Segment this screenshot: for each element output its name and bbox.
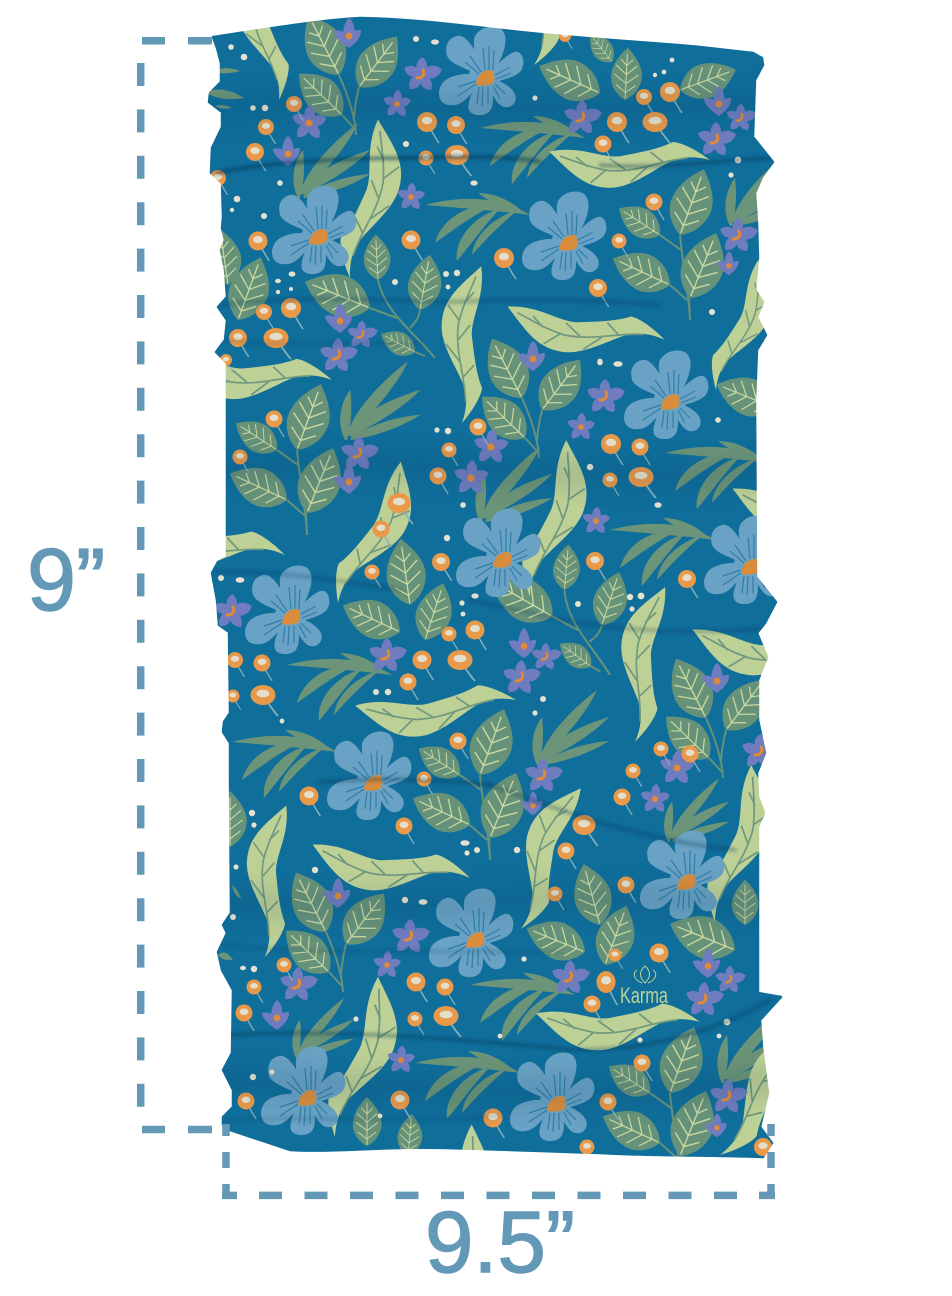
blue flowers	[246, 28, 787, 1140]
orange berries	[210, 30, 774, 1166]
fabric folds and shading	[210, 100, 780, 1122]
fabric: neck gaiter	[208, 16, 782, 1158]
label: 9 inches: 9”	[27, 530, 105, 629]
logo: Karma lotus mark	[621, 966, 668, 1003]
long pale leaves	[217, 20, 770, 1156]
cream dots	[218, 36, 741, 1118]
leaf sprigs	[204, 7, 782, 1178]
infographic	[30, 16, 782, 1274]
label: 9.5 inches: 9.5”	[425, 1194, 575, 1291]
purple star flowers	[214, 18, 780, 1137]
fern fronds	[205, 68, 802, 1119]
logo: Karma lotus mark: Karma	[620, 983, 669, 1008]
